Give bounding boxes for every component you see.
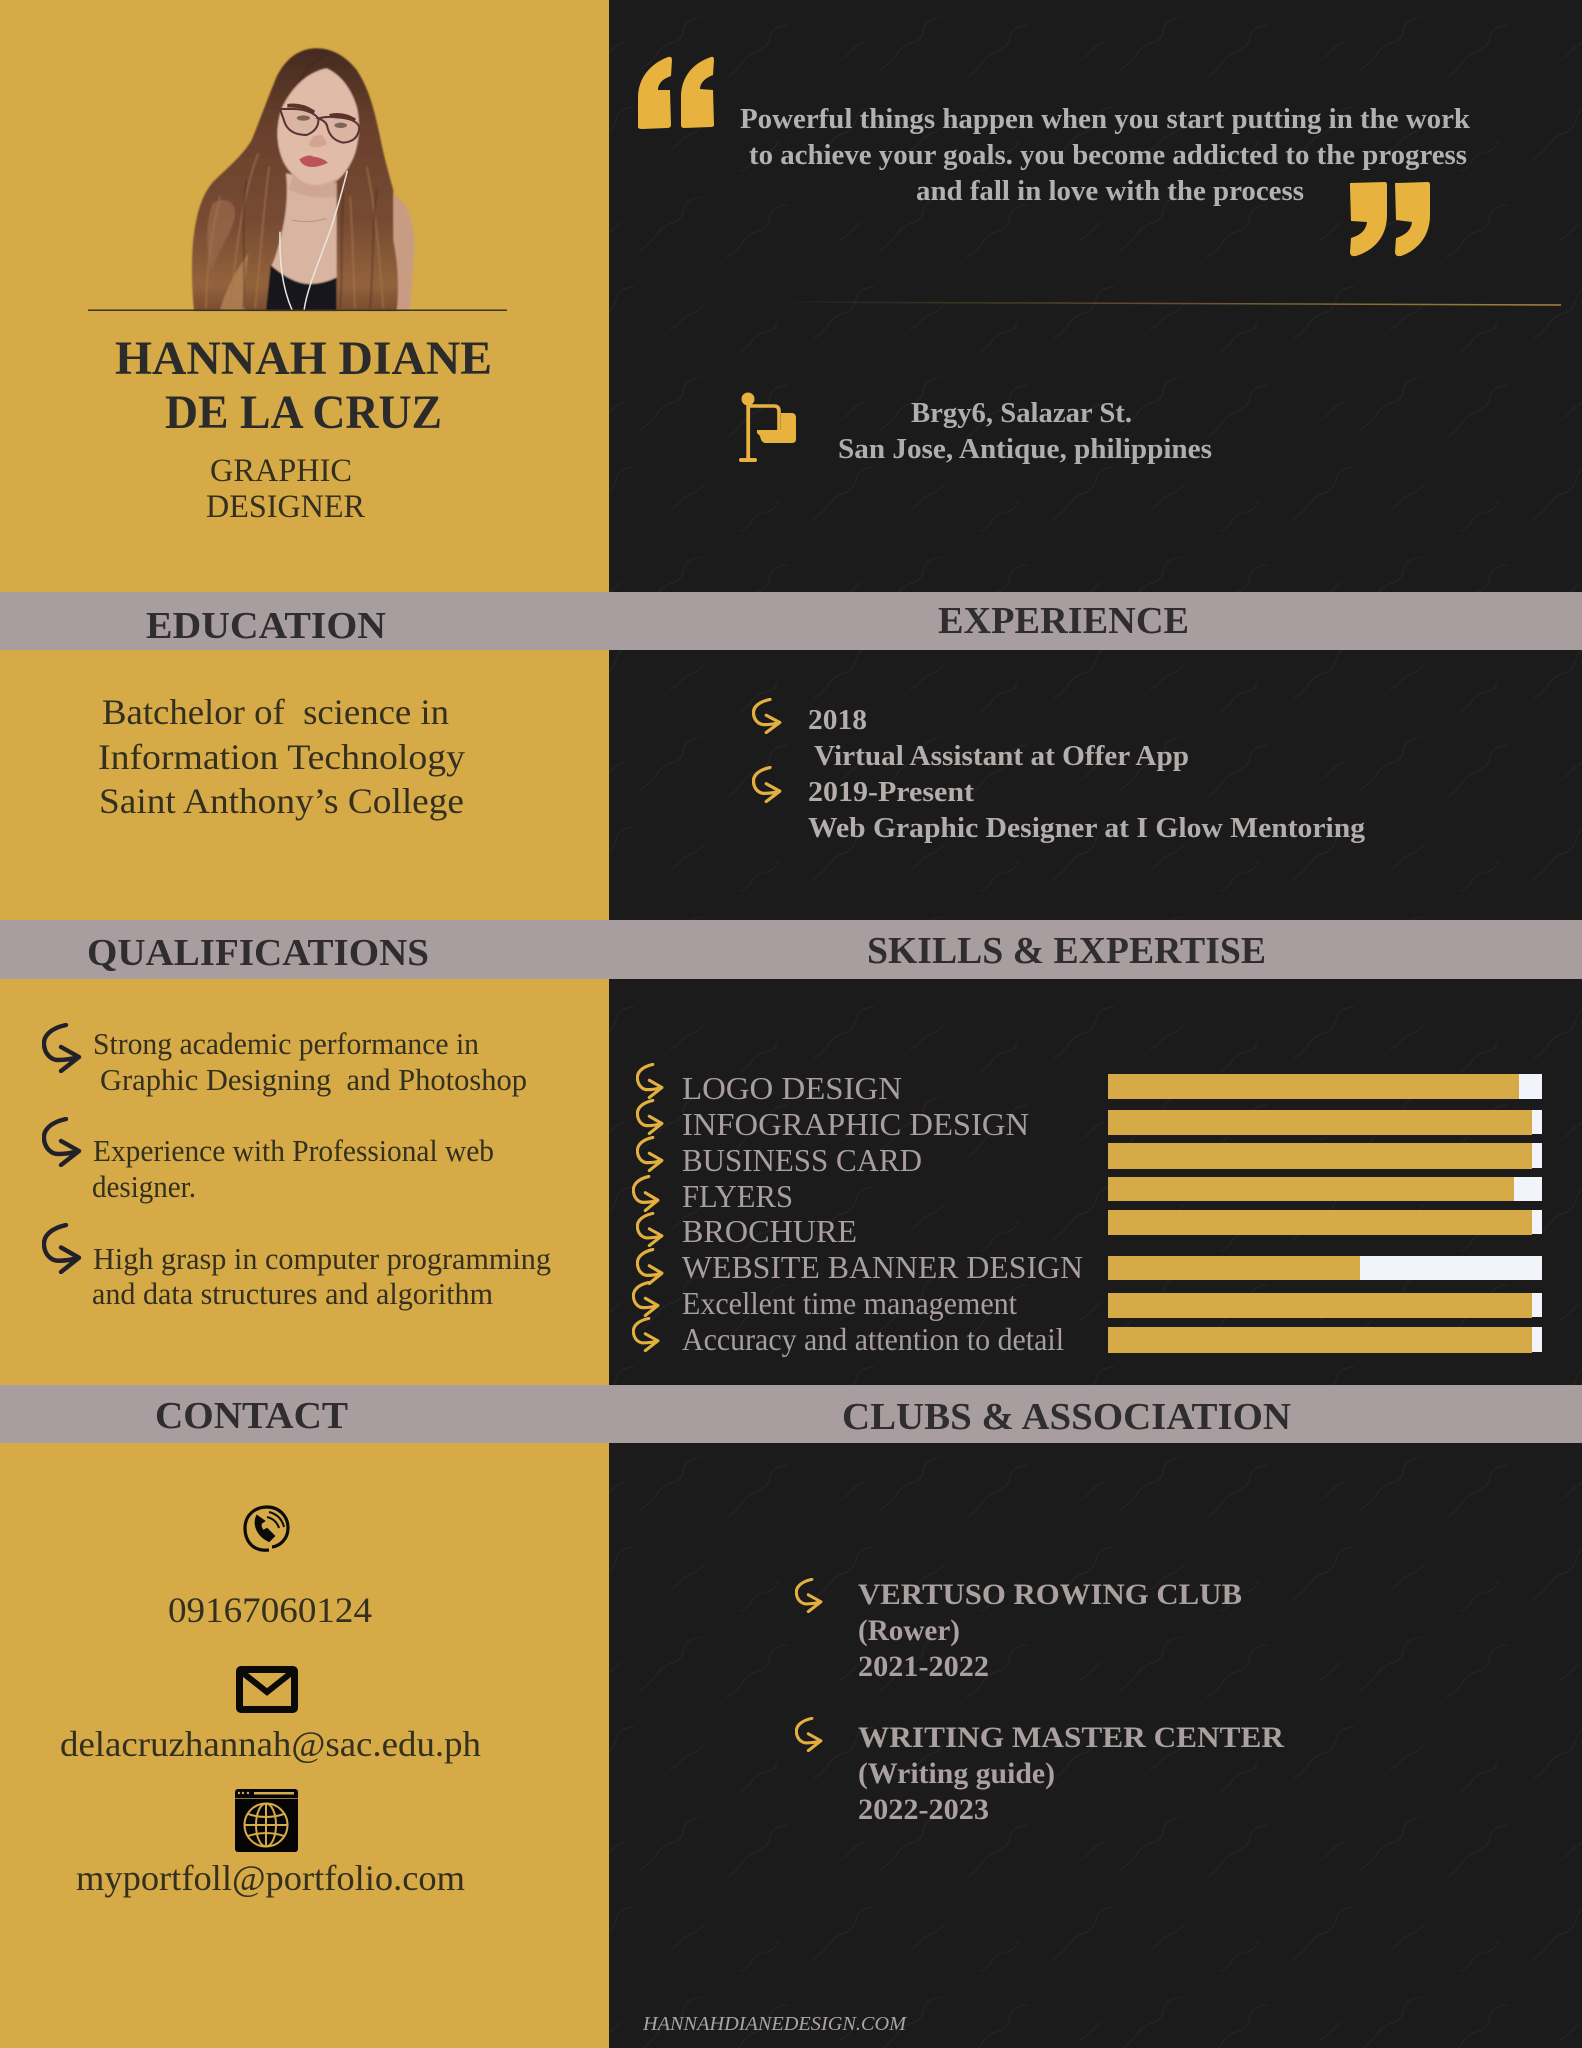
club one text: VERTUSO ROWING CLUB: [858, 1578, 1242, 1611]
arrow bullet: [796, 1579, 821, 1612]
skill labels: INFOGRAPHIC DESIGN: [682, 1106, 1029, 1142]
club one text: 2021-2022: [858, 1650, 989, 1683]
club one text: (Rower): [858, 1614, 960, 1647]
address text: Brgy6, Salazar St.: [911, 397, 1132, 429]
skill labels: FLYERS: [682, 1178, 793, 1214]
divider under photo: [88, 310, 507, 311]
icon: address flag: [739, 392, 796, 462]
experience text: Web Graphic Designer at I Glow Mentoring: [808, 812, 1366, 844]
skill bars: [1108, 1074, 1542, 1353]
club one text: [858, 1578, 1242, 1683]
panel: clubs list: [796, 1578, 1284, 1826]
job title: DESIGNER: [206, 489, 365, 525]
heading: education: EDUCATION: [146, 605, 386, 647]
address text: [838, 397, 1212, 465]
panel: dark main background: [609, 0, 1582, 2048]
club two text: [858, 1721, 1284, 1826]
band: contact and clubs: [0, 1385, 1582, 1443]
experience text: Virtual Assistant at Offer App: [814, 740, 1189, 772]
divider under quote: [769, 302, 1561, 305]
heading: qualifications: QUALIFICATIONS: [87, 932, 429, 974]
arrow bullet: [753, 767, 780, 802]
skill labels: BROCHURE: [682, 1213, 857, 1249]
skill labels: WEBSITE BANNER DESIGN: [682, 1249, 1083, 1285]
band: education and experience: [0, 592, 1582, 650]
arrow bullet: [44, 1225, 79, 1272]
address text: San Jose, Antique, philippines: [838, 433, 1212, 465]
portrait photo illustration: [192, 48, 414, 311]
panel: contact details: [60, 1507, 481, 1898]
quote text: and fall in love with the process: [916, 175, 1304, 207]
icon: closing quotation mark: [1350, 182, 1430, 256]
icon: phone: [245, 1507, 288, 1550]
education text: Batchelor of science in: [102, 692, 449, 732]
skill labels: Excellent time management: [682, 1285, 1017, 1321]
qualifications text: Graphic Designing and Photoshop: [100, 1062, 527, 1097]
qualifications text: Strong academic performance in: [93, 1026, 479, 1061]
phone number: 09167060124: [168, 1590, 372, 1630]
education text: [98, 692, 465, 821]
job title: GRAPHIC: [210, 453, 352, 489]
skill labels: Accuracy and attention to detail: [682, 1321, 1064, 1357]
qualifications text: High grasp in computer programming: [93, 1241, 551, 1276]
arrow bullet: [753, 699, 780, 733]
heading: skills and expertise: SKILLS & EXPERTISE: [867, 930, 1266, 972]
band: qualifications and skills: [0, 920, 1582, 979]
qualifications text: Experience with Professional web: [93, 1133, 494, 1168]
panel: experience list: [753, 699, 1366, 844]
skill labels: [682, 1070, 1083, 1357]
icon: opening quotation mark: [638, 57, 714, 129]
club two text: WRITING MASTER CENTER: [858, 1721, 1284, 1754]
experience text: 2018: [808, 704, 867, 736]
qualifications text: [92, 1026, 551, 1311]
panel: qualifications list: [44, 1025, 551, 1311]
qualifications text: designer.: [92, 1169, 196, 1204]
panel: gold sidebar background: [0, 0, 609, 2048]
heading: name: HANNAH DIANE: [115, 332, 492, 385]
job title: [206, 453, 365, 525]
club two text: 2022-2023: [858, 1793, 989, 1826]
skill arrows: [633, 1064, 662, 1351]
education text: Saint Anthony’s College: [99, 781, 464, 821]
arrow bullet: [796, 1718, 821, 1751]
email address: delacruzhannah@sac.edu.ph: [60, 1724, 481, 1764]
heading: name: DE LA CRUZ: [165, 386, 442, 439]
club two text: (Writing guide): [858, 1757, 1055, 1790]
experience text: [808, 704, 1366, 844]
quote text: to achieve your goals. you become addicted to the progress: [749, 139, 1467, 171]
portfolio address: myportfoll@portfolio.com: [76, 1858, 465, 1898]
experience text: 2019-Present: [808, 776, 974, 808]
arrow bullet: [44, 1025, 79, 1071]
footer website: HANNAHDIANEDESIGN.COM: [642, 2013, 907, 2035]
heading: clubs and association: CLUBS & ASSOCIATION: [842, 1396, 1291, 1438]
quote text: Powerful things happen when you start putting in the work: [740, 103, 1471, 135]
education text: Information Technology: [98, 737, 465, 777]
panel: skills list: [633, 1064, 1542, 1357]
skill labels: BUSINESS CARD: [682, 1142, 922, 1178]
quote text: [740, 103, 1471, 207]
heading: name: [115, 332, 492, 439]
heading: experience: EXPERIENCE: [938, 600, 1189, 642]
skill labels: LOGO DESIGN: [682, 1070, 902, 1106]
icon: mail: [236, 1666, 298, 1713]
qualifications text: and data structures and algorithm: [92, 1276, 493, 1311]
icon: website globe: [235, 1789, 298, 1852]
heading: contact: CONTACT: [155, 1395, 348, 1437]
arrow bullet: [44, 1119, 79, 1165]
